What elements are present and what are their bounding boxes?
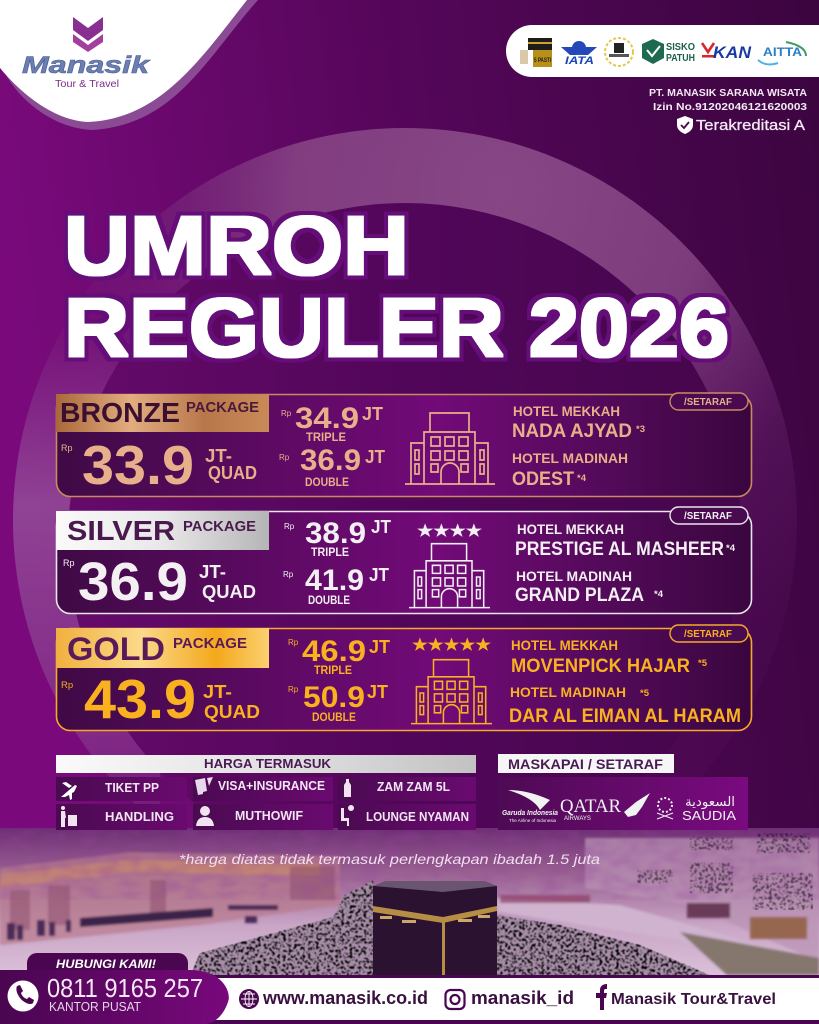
- panel: silver package: *4: [654, 589, 664, 600]
- gallery crowds: [637, 833, 813, 910]
- logo: Manasik Tour & Travel: Manasik: [22, 52, 151, 79]
- company information: PT. MANASIK SARANA WISATA: [649, 87, 807, 99]
- panel: gold package: *5: [698, 658, 708, 669]
- panel: bronze package: NADA AJYAD: [512, 421, 632, 442]
- panel: bronze package: DOUBLE: [305, 475, 349, 489]
- setaraf tag: [670, 507, 748, 524]
- panel: maskapai: [498, 754, 748, 830]
- panel: bronze package: HOTEL MADINAH: [512, 450, 628, 466]
- panel: silver package: HOTEL MADINAH: [516, 568, 632, 584]
- icon: instagram: [446, 990, 464, 1009]
- icon: facebook: [596, 984, 607, 1010]
- facebook name: Manasik Tour&Travel: [611, 991, 776, 1008]
- panel: bronze package: JT-: [205, 446, 232, 466]
- icon: visa documents: [195, 777, 213, 795]
- icon: globe: [239, 989, 259, 1009]
- panel: silver package: GRAND PLAZA: [515, 585, 644, 606]
- panel: bronze package: QUAD: [208, 463, 257, 483]
- panel: gold package: [56, 625, 752, 730]
- company information: Izin No.91202046121620003: [653, 101, 807, 113]
- logo: Qatar Airways: QATAR: [560, 796, 621, 817]
- panel: silver package: JT: [369, 565, 389, 585]
- title: [64, 199, 729, 374]
- panel: bronze package: ODEST: [512, 469, 574, 490]
- panel: bronze package: JT: [365, 447, 385, 467]
- panel: silver package: 41.9: [305, 564, 364, 597]
- website: www.manasik.co.id: [262, 988, 428, 1008]
- setaraf tag: [670, 393, 748, 410]
- panel: silver package: PRESTIGE AL MASHEER: [515, 539, 724, 560]
- panel: gold package: MOVENPICK HAJAR: [511, 656, 690, 677]
- logo: 5 pasti umrah: 5 PASTI: [534, 58, 551, 64]
- panel: harga termasuk: HANDLING: [105, 809, 174, 824]
- panel: bronze package: Rp: [279, 453, 290, 462]
- panel: bronze package: HOTEL MEKKAH: [513, 403, 620, 419]
- panel: gold package: DAR AL EIMAN AL HARAM: [509, 706, 741, 727]
- kaaba: [373, 881, 497, 976]
- panel: bronze package: *3: [636, 424, 645, 435]
- panel: silver package: JT-: [199, 562, 226, 582]
- icon: luggage handling: [61, 806, 77, 827]
- panel: gold package: DOUBLE: [312, 710, 356, 724]
- phone block: KANTOR PUSAT: [49, 999, 141, 1014]
- panel: silver package: TRIPLE: [311, 545, 349, 559]
- logo: AITTA: [758, 42, 806, 64]
- company information: [649, 87, 807, 134]
- logo: Sisko Patuh: [642, 39, 695, 64]
- company information: Terakreditasi A: [696, 118, 805, 134]
- hubungi kami tag: HUBUNGI KAMI!: [56, 957, 156, 971]
- panel: gold package: JT: [367, 682, 388, 702]
- icon: shield check: [677, 116, 693, 134]
- title: UMROH: [64, 199, 409, 292]
- logo: KAN: KAN: [713, 43, 752, 62]
- panel: gold package: GOLD: [67, 631, 165, 667]
- logo: Saudia: [657, 794, 736, 823]
- accreditation logos pill: [506, 25, 819, 77]
- logo: IATA: IATA: [565, 55, 594, 67]
- buildings: [0, 838, 819, 975]
- panel: silver package: HOTEL MEKKAH: [517, 521, 624, 537]
- phone block: [0, 970, 229, 1024]
- panel: silver package: *4: [726, 543, 736, 554]
- panel: gold package: TRIPLE: [314, 663, 352, 677]
- panel: silver package: 36.9: [78, 552, 188, 612]
- icon: lounge seat: [341, 805, 354, 826]
- panel: silver package: ★★★★: [417, 523, 483, 540]
- crowd: [190, 880, 712, 976]
- panel: harga termasuk: HARGA TERMASUK: [204, 756, 332, 771]
- panel: gold package: QUAD: [204, 702, 260, 722]
- logo: Saudia: SAUDIA: [682, 808, 736, 823]
- panel: silver package: Rp: [63, 558, 75, 568]
- panel: silver package: [56, 507, 752, 614]
- panel: gold package: 46.9: [302, 635, 366, 668]
- logo: 5 pasti umrah: [520, 38, 552, 67]
- panel: bronze package: [56, 393, 752, 496]
- panel: bronze package: BRONZE: [60, 397, 180, 428]
- icon: phone: [8, 980, 38, 1012]
- panel: silver package: Rp: [284, 522, 295, 531]
- panel: bronze package: JT: [362, 404, 383, 424]
- panel: bronze package: 33.9: [82, 434, 194, 496]
- panel: maskapai: MASKAPAI / SETARAF: [508, 756, 663, 772]
- setaraf tag: /SETARAF: [684, 397, 732, 408]
- panel: gold package: ★★★★★: [412, 637, 492, 654]
- panel: gold package: Rp: [61, 680, 73, 691]
- panel: bronze package: PACKAGE: [186, 399, 259, 416]
- panel: gold package: Rp: [288, 638, 299, 647]
- panel: bronze package: TRIPLE: [306, 430, 346, 444]
- instagram handle: manasik_id: [471, 988, 574, 1008]
- logo: Manasik Tour & Travel: [22, 17, 151, 90]
- logo: Garuda Indonesia: [502, 790, 558, 823]
- panel: silver package: 38.9: [305, 517, 366, 550]
- icon: hotel: [405, 413, 495, 484]
- panel: gold package: 43.9: [84, 668, 196, 730]
- panel: silver package: QUAD: [202, 582, 256, 602]
- panel: bronze package: Rp: [281, 409, 292, 418]
- logo: Qatar Airways: AIRWAYS: [564, 816, 591, 822]
- mottled photo texture: [0, 830, 819, 900]
- panel: gold package: JT-: [203, 682, 232, 702]
- footer: [0, 953, 819, 1024]
- panel: silver package: PACKAGE: [183, 518, 256, 535]
- logo: Sisko Patuh: PATUH: [666, 53, 695, 64]
- logo: Saudia: السعودية: [685, 794, 735, 810]
- panel: gold package: HOTEL MADINAH: [510, 684, 626, 700]
- panel: harga termasuk: TIKET PP: [105, 780, 159, 795]
- icon: hotel: [411, 660, 492, 724]
- panel: bronze package: 34.9: [295, 402, 359, 435]
- panel: bronze package: *4: [577, 473, 587, 484]
- panel: silver package: JT: [371, 517, 391, 537]
- header logo panel: [0, 0, 258, 130]
- panel: harga termasuk: MUTHOWIF: [235, 808, 303, 823]
- panel: harga termasuk: [56, 755, 476, 830]
- hubungi kami tag: [27, 953, 188, 979]
- panel: silver package: DOUBLE: [308, 593, 350, 607]
- icon: water bottle: [344, 779, 351, 797]
- panel: bronze package: Rp: [61, 443, 73, 453]
- panel: harga termasuk: ZAM ZAM 5L: [377, 779, 450, 794]
- phone block: 0811 9165 257: [47, 973, 203, 1003]
- logo: seal: [605, 38, 633, 66]
- logo: Sisko Patuh: SISKO: [666, 42, 695, 53]
- panel: gold package: HOTEL MEKKAH: [511, 637, 618, 653]
- panel: gold package: JT: [369, 637, 390, 657]
- panel: gold package: Rp: [288, 685, 299, 694]
- logo: Garuda Indonesia: The Airline of Indonesia: [509, 818, 557, 823]
- logo: IATA: [561, 41, 597, 67]
- logo: AITTA: AITTA: [763, 45, 802, 59]
- panel: silver package: Rp: [283, 570, 294, 579]
- title: REGULER 2026: [64, 281, 729, 374]
- panel: gold package: *5: [640, 688, 650, 699]
- setaraf tag: /SETARAF: [684, 629, 732, 640]
- panel: gold package: PACKAGE: [173, 635, 247, 652]
- panel: silver package: SILVER: [67, 515, 175, 546]
- icon: airplane: [61, 782, 77, 800]
- logo: Garuda Indonesia: Garuda Indonesia: [502, 810, 558, 817]
- note: *harga diatas tidak termasuk perlengkapan ibadah 1.5 juta: [179, 851, 600, 867]
- panel: gold package: 50.9: [303, 681, 365, 714]
- setaraf tag: [670, 625, 748, 642]
- photo: kaaba and crowd: [0, 828, 819, 978]
- panel: bronze package: 36.9: [300, 444, 361, 477]
- logo: Manasik Tour & Travel: Tour & Travel: [55, 78, 119, 90]
- panel: harga termasuk: LOUNGE NYAMAN: [366, 809, 469, 824]
- logo: Qatar Airways: [560, 793, 650, 822]
- icon: muthowif: [196, 806, 214, 826]
- setaraf tag: /SETARAF: [684, 511, 732, 522]
- panel: harga termasuk: VISA+INSURANCE: [218, 778, 325, 793]
- icon: hotel: [409, 544, 490, 608]
